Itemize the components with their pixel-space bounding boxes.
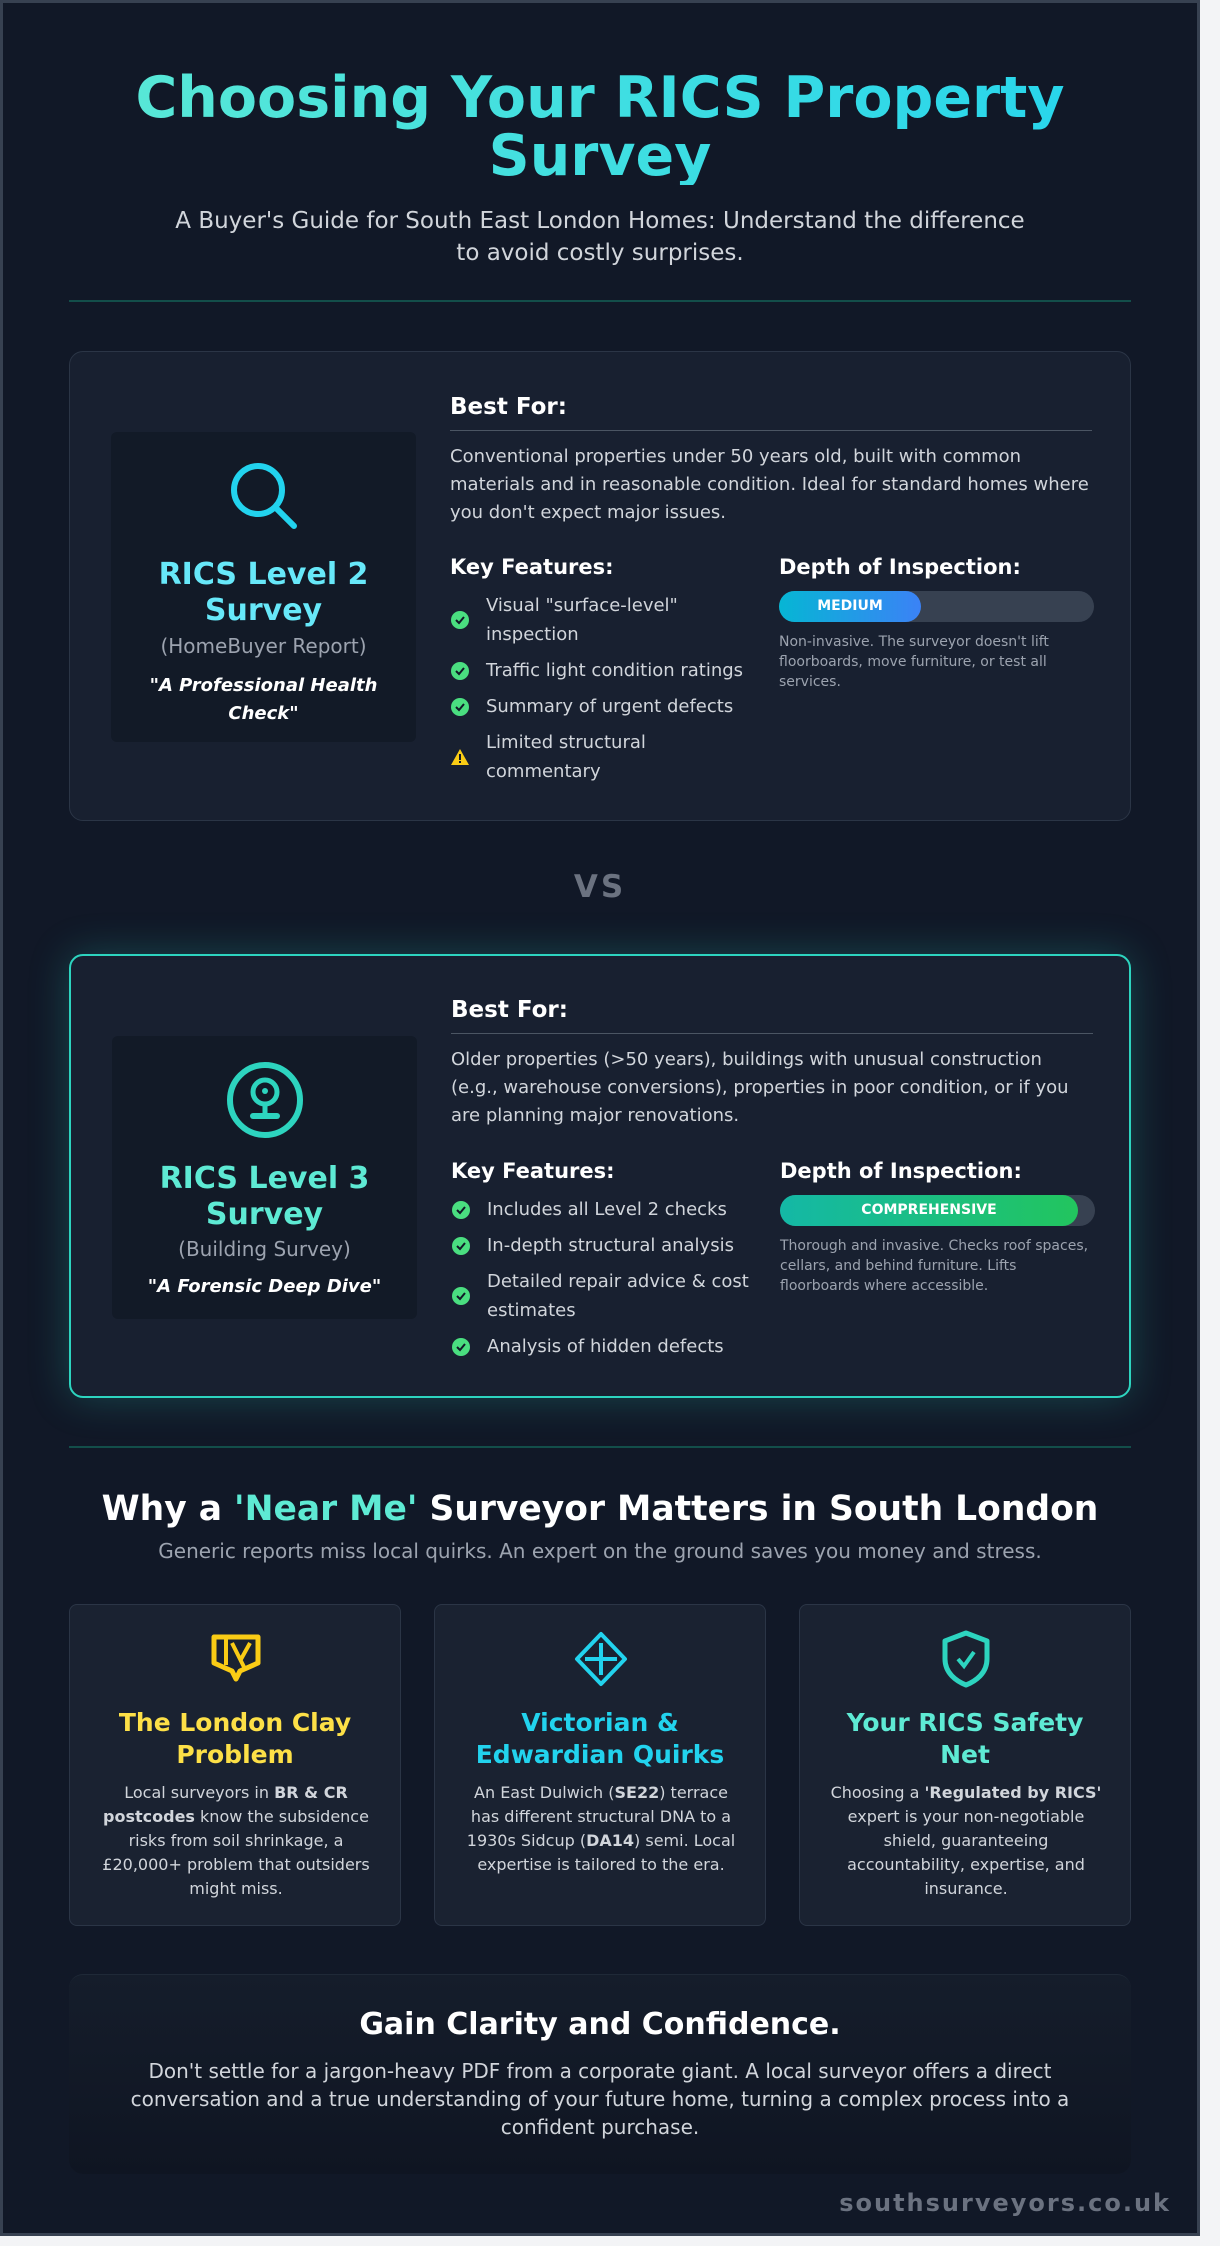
best for: Older properties (>50 years), buildings with unusual construction (e.g., warehouse conversions), properties in poor condition, or if you are planning major renovations. xyxy=(451,1049,1069,1126)
panel: level 2: Visual "surface-level" inspection xyxy=(486,595,678,645)
panel: level 3: In-depth structural analysis xyxy=(487,1235,734,1256)
icon: diamond xyxy=(574,1632,628,1686)
panel: level 3: COMPREHENSIVE xyxy=(861,1202,997,1218)
best for: Best For: xyxy=(451,997,568,1023)
card: victorian: Edwardian Quirks xyxy=(476,1740,724,1769)
footer url: southsurveyors.co.uk xyxy=(839,2189,1171,2217)
panel: level 2: Non-invasive. The surveyor doesn't lift floorboards, move furniture, or test all services. xyxy=(779,634,1049,690)
card: safety net xyxy=(799,1604,1131,1926)
key features xyxy=(451,1159,749,1357)
panel: level 2: Summary of urgent defects xyxy=(486,696,733,717)
card: london clay: Problem xyxy=(176,1740,294,1769)
card: london clay xyxy=(69,1604,401,1926)
panel: level 3: Includes all Level 2 checks xyxy=(487,1199,727,1220)
card: victorian xyxy=(434,1604,766,1926)
key features: Key Features: xyxy=(450,555,614,579)
card: victorian: Victorian & xyxy=(521,1708,679,1737)
conclusion text: Don't settle for a jargon-heavy PDF from a corporate giant. A local surveyor offers a direct conversation and a true understanding of your future home, turning a complex process into a confident purchase. xyxy=(131,2059,1069,2139)
level 2 title xyxy=(159,557,368,628)
icon: shield xyxy=(942,1630,990,1688)
card: safety net: Net xyxy=(940,1740,990,1769)
panel: level 3: Analysis of hidden defects xyxy=(487,1336,724,1357)
level 2 summary box: (HomeBuyer Report) xyxy=(160,634,367,658)
level 2 title: RICS Level 2 xyxy=(159,557,368,592)
card: safety net: Your RICS Safety xyxy=(847,1708,1083,1737)
panel: level 3: Thorough and invasive. Checks roof spaces, cellars, and behind furniture. Lifts floorboards where accessible. xyxy=(780,1238,1088,1294)
depth of inspection: medium xyxy=(779,555,1094,690)
level 2 summary box xyxy=(111,432,416,742)
subtitle: A Buyer's Guide for South East London Homes: Understand the difference to avoid costly surprises. xyxy=(175,208,1025,266)
level 3 title xyxy=(160,1161,369,1232)
card: london clay: Local surveyors in BR & CR postcodes know the subsidence risks from soil shrinkage, a £20,000+ problem that outsiders might miss. xyxy=(102,1783,370,1898)
icon: inspection target xyxy=(227,1062,303,1138)
title: Choosing Your RICS Property xyxy=(135,65,1065,131)
title: Survey xyxy=(489,123,711,189)
panel: level 2 xyxy=(69,351,1131,821)
depth of inspection: medium: Depth of Inspection: xyxy=(779,555,1021,579)
icon: clay layers xyxy=(212,1634,260,1682)
level 2 summary box: "A Professional Health Check" xyxy=(150,675,377,724)
level 3 title: Survey xyxy=(206,1197,323,1232)
icon: magnifier xyxy=(231,463,297,529)
level 3 summary box xyxy=(112,1036,417,1319)
depth of inspection: comprehensive: Depth of Inspection: xyxy=(780,1159,1022,1183)
panel: level 2: MEDIUM xyxy=(817,598,883,614)
key features: Key Features: xyxy=(451,1159,615,1183)
vs: VS xyxy=(574,869,626,905)
best for xyxy=(450,394,1092,523)
best for xyxy=(451,997,1093,1126)
title xyxy=(3,69,1197,185)
panel: level 2: Limited structural commentary xyxy=(486,732,646,782)
best for: Best For: xyxy=(450,394,567,420)
level 2 title: Survey xyxy=(205,593,322,628)
level 3 summary box: (Building Survey) xyxy=(178,1237,351,1261)
card: safety net: Choosing a 'Regulated by RICS' expert is your non-negotiable shield, guaranteeing accountability, expertise, and insurance. xyxy=(831,1783,1101,1898)
level 3 summary box: "A Forensic Deep Dive" xyxy=(148,1276,381,1297)
panel: level 3: Detailed repair advice & cost estimates xyxy=(487,1271,749,1321)
card: victorian: An East Dulwich (SE22) terrace has different structural DNA to a 1930s Sidcup (DA14) semi. Local expertise is tailored to the era. xyxy=(467,1783,735,1874)
depth of inspection: comprehensive xyxy=(780,1159,1095,1294)
key features xyxy=(450,555,743,782)
subheading: Generic reports miss local quirks. An expert on the ground saves you money and stress. xyxy=(158,1539,1042,1563)
best for: Conventional properties under 50 years old, built with common materials and in reasonable condition. Ideal for standard homes where you don't expect major issues. xyxy=(450,446,1089,523)
level 3 title: RICS Level 3 xyxy=(160,1161,369,1196)
card: london clay: The London Clay xyxy=(119,1708,351,1737)
panel: level 3 xyxy=(69,954,1131,1398)
panel: level 2: Traffic light condition ratings xyxy=(486,660,743,681)
conclusion panel xyxy=(69,1974,1131,2174)
conclusion heading: Gain Clarity and Confidence. xyxy=(359,2007,841,2042)
heading: near me: Why a 'Near Me' Surveyor Matters in South London xyxy=(102,1489,1098,1529)
